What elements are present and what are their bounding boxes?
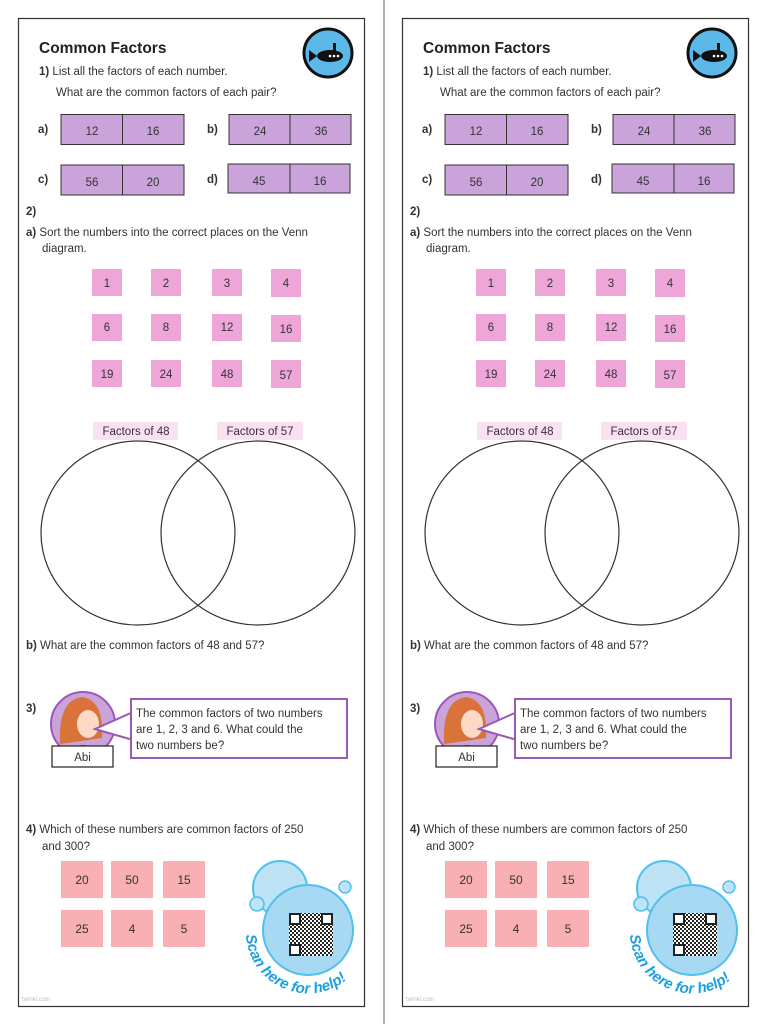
number cards: 2	[547, 278, 553, 290]
number cards: 12	[605, 322, 617, 334]
number cards: 12	[221, 322, 233, 334]
answer cards: 5	[181, 922, 188, 936]
question 1 text	[39, 66, 277, 99]
pairs of numbers: 24	[254, 126, 267, 138]
question 2 text: a) Sort the numbers into the correct places on the Venn	[410, 227, 692, 239]
question 3 with Abi: 3)	[410, 703, 420, 715]
pairs of numbers: 24	[638, 126, 651, 138]
answer cards: 4	[513, 922, 520, 936]
question 1 text: 1) List all the factors of each number.	[423, 66, 612, 78]
question 3 with Abi: Abi	[74, 752, 91, 764]
pairs of numbers: 36	[699, 126, 711, 138]
question 3 with Abi: The common factors of two numbers	[520, 708, 707, 720]
answer cards	[61, 861, 205, 947]
number cards: 6	[488, 322, 494, 334]
title: Common Factors	[423, 40, 550, 57]
answer cards: 50	[509, 873, 523, 887]
question 3 with Abi: are 1, 2, 3 and 6. What could the	[520, 724, 687, 736]
pairs of numbers: 12	[470, 126, 482, 138]
question 2b: b) What are the common factors of 48 and 57?	[26, 640, 264, 652]
pairs of numbers: d)	[207, 174, 218, 186]
venn diagram: Factors of 57	[226, 426, 294, 438]
answer cards: 50	[125, 873, 139, 887]
number cards: 3	[224, 278, 230, 290]
panel: right worksheet	[402, 18, 750, 1008]
question 1 text: 1) List all the factors of each number.	[39, 66, 228, 78]
answer cards: 25	[75, 922, 89, 936]
QR help bubble: Scan here for help!	[630, 934, 730, 994]
pairs of numbers: 56	[470, 177, 482, 189]
number cards: 48	[605, 369, 617, 381]
icon: submarine	[304, 29, 352, 77]
number cards: 16	[280, 324, 292, 336]
pairs of numbers	[38, 114, 351, 195]
question 3 with Abi: The common factors of two numbers	[136, 708, 323, 720]
answer cards: 25	[459, 922, 473, 936]
number cards: 48	[221, 369, 233, 381]
pairs of numbers: c)	[422, 174, 432, 186]
question 2 text	[410, 206, 692, 255]
icon: submarine	[688, 29, 736, 77]
footer: twinkl: twinkl.com	[22, 997, 50, 1003]
answer cards: 15	[177, 873, 191, 887]
pairs of numbers: 56	[86, 177, 98, 189]
number cards: 19	[101, 369, 113, 381]
number cards: 4	[667, 278, 674, 290]
pairs of numbers: 20	[147, 177, 159, 189]
question 3 with Abi	[26, 692, 347, 767]
answer cards: 5	[565, 922, 572, 936]
pairs of numbers: 45	[253, 176, 265, 188]
pairs of numbers: c)	[38, 174, 48, 186]
question 4: 4) Which of these numbers are common factors of 250	[26, 824, 303, 836]
QR help bubble	[630, 860, 738, 994]
number cards	[92, 269, 301, 388]
question 4: and 300?	[426, 841, 474, 853]
venn diagram	[425, 422, 739, 625]
question 3 with Abi: two numbers be?	[520, 740, 608, 752]
number cards: 24	[160, 369, 173, 381]
number cards	[476, 269, 685, 388]
number cards: 1	[488, 278, 494, 290]
number cards: 8	[547, 322, 553, 334]
pairs of numbers: b)	[207, 124, 218, 136]
pairs of numbers	[422, 114, 735, 195]
footer: twinkl: twinkl.com	[406, 997, 434, 1003]
pairs of numbers: a)	[422, 124, 432, 136]
pairs of numbers: 16	[531, 126, 543, 138]
question 1 text	[423, 66, 661, 99]
question 1 text: What are the common factors of each pair?	[440, 87, 661, 99]
question 3 with Abi: Abi	[458, 752, 475, 764]
question 2 text: a) Sort the numbers into the correct places on the Venn	[26, 227, 308, 239]
number cards: 6	[104, 322, 110, 334]
pairs of numbers: b)	[591, 124, 602, 136]
number cards: 24	[544, 369, 557, 381]
venn diagram	[41, 422, 355, 625]
question 4	[410, 824, 687, 853]
answer cards: 4	[129, 922, 136, 936]
question 2 text: diagram.	[426, 243, 471, 255]
question 2 text	[26, 206, 308, 255]
question 2 text: 2)	[26, 206, 36, 218]
question 4	[26, 824, 303, 853]
venn diagram: Factors of 48	[486, 426, 554, 438]
number cards: 1	[104, 278, 110, 290]
number cards: 19	[485, 369, 497, 381]
question 3 with Abi: two numbers be?	[136, 740, 224, 752]
answer cards: 20	[75, 873, 89, 887]
pairs of numbers: 16	[314, 176, 326, 188]
question 3 with Abi: are 1, 2, 3 and 6. What could the	[136, 724, 303, 736]
pairs of numbers: 16	[698, 176, 710, 188]
pairs of numbers: 45	[637, 176, 649, 188]
pairs of numbers: a)	[38, 124, 48, 136]
pairs of numbers: d)	[591, 174, 602, 186]
number cards: 57	[664, 370, 676, 382]
question 2 text: 2)	[410, 206, 420, 218]
QR help bubble	[246, 860, 354, 994]
pairs of numbers: 36	[315, 126, 327, 138]
number cards: 2	[163, 278, 169, 290]
pairs of numbers: 16	[147, 126, 159, 138]
number cards: 57	[280, 370, 292, 382]
pairs of numbers: 12	[86, 126, 98, 138]
question 3 with Abi: 3)	[26, 703, 36, 715]
title: Common Factors	[39, 40, 166, 57]
venn diagram: Factors of 57	[610, 426, 678, 438]
number cards: 8	[163, 322, 169, 334]
answer cards: 15	[561, 873, 575, 887]
panel: left worksheet	[18, 18, 366, 1008]
number cards: 16	[664, 324, 676, 336]
question 4: 4) Which of these numbers are common factors of 250	[410, 824, 687, 836]
question 1 text: What are the common factors of each pair?	[56, 87, 277, 99]
venn diagram: Factors of 48	[102, 426, 170, 438]
number cards: 3	[608, 278, 614, 290]
question 4: and 300?	[42, 841, 90, 853]
question 2 text: diagram.	[42, 243, 87, 255]
pairs of numbers: 20	[531, 177, 543, 189]
answer cards	[445, 861, 589, 947]
question 2b: b) What are the common factors of 48 and 57?	[410, 640, 648, 652]
question 3 with Abi	[410, 692, 731, 767]
answer cards: 20	[459, 873, 473, 887]
number cards: 4	[283, 278, 290, 290]
QR help bubble: Scan here for help!	[246, 934, 346, 994]
